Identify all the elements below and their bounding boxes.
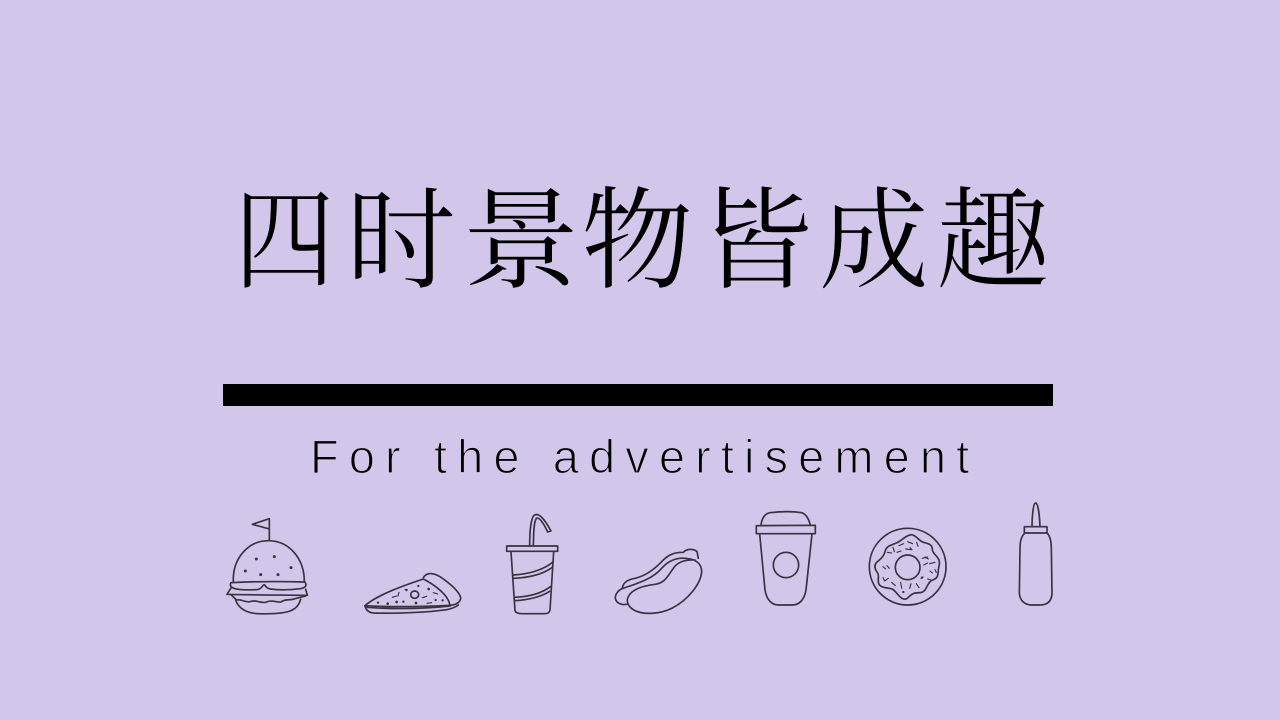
title: 成 [819, 181, 929, 304]
title: 时 [346, 181, 456, 304]
icon: soda cup [507, 514, 558, 614]
title [234, 181, 1050, 304]
icon: donut [869, 528, 946, 605]
icon: sauce bottle [1019, 503, 1052, 605]
subtitle: For the advertisement [310, 430, 979, 483]
icon: coffee cup [756, 512, 815, 605]
title: 趣 [936, 181, 1050, 304]
title: 皆 [699, 181, 813, 304]
icon: burger [227, 519, 307, 614]
divider bar [223, 384, 1053, 406]
title: 景 [462, 181, 580, 304]
title: 四 [234, 181, 335, 304]
icon: hot dog [615, 549, 702, 613]
icon: pizza slice [365, 574, 461, 613]
title: 物 [581, 181, 693, 304]
